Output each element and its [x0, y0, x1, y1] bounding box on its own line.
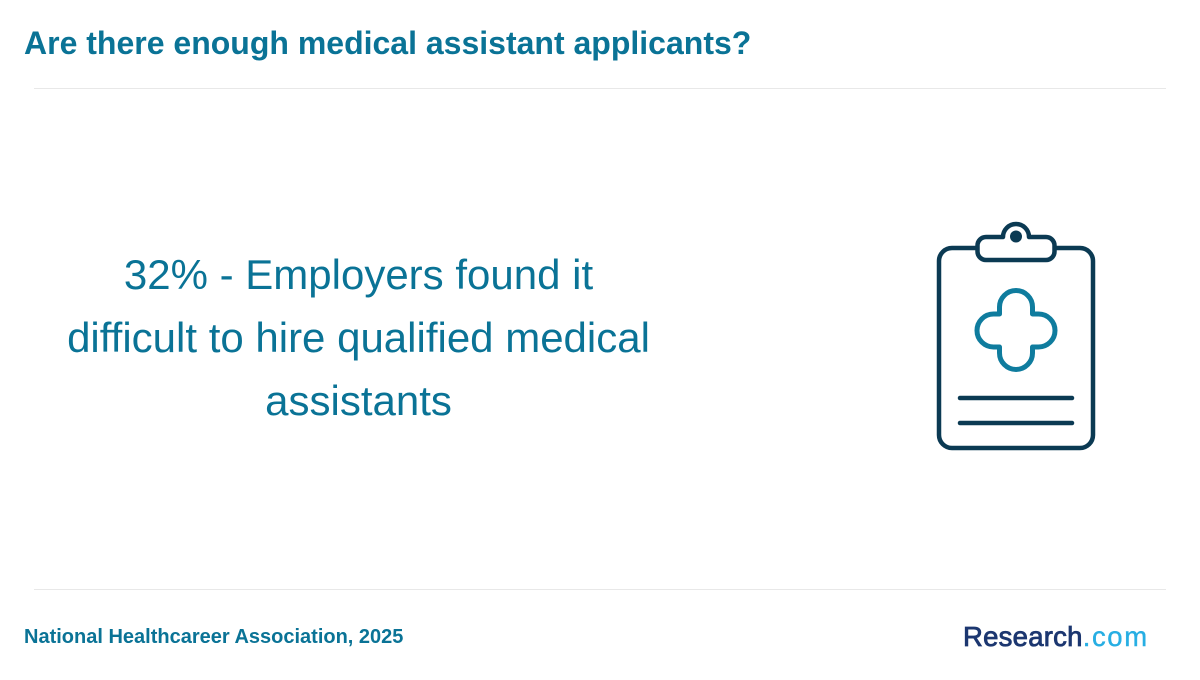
main statistic text: [67, 251, 650, 424]
main statistic text: 32% - Employers found it: [124, 251, 593, 298]
main statistic text: assistants: [265, 377, 452, 424]
source: National Healthcareer Association, 2025: [24, 626, 403, 648]
medical cross: [977, 291, 1055, 370]
logo: Research.com: [963, 621, 1149, 652]
text line 1: [960, 396, 1072, 400]
title: Are there enough medical assistant applicants?: [24, 25, 751, 61]
clipboard body: [939, 248, 1093, 448]
text line 2: [960, 421, 1072, 425]
clip hole: [1010, 230, 1022, 242]
main statistic text: difficult to hire qualified medical: [67, 314, 650, 361]
icon: clipboard with medical cross: [936, 222, 1096, 450]
clipboard clip: [978, 224, 1054, 260]
